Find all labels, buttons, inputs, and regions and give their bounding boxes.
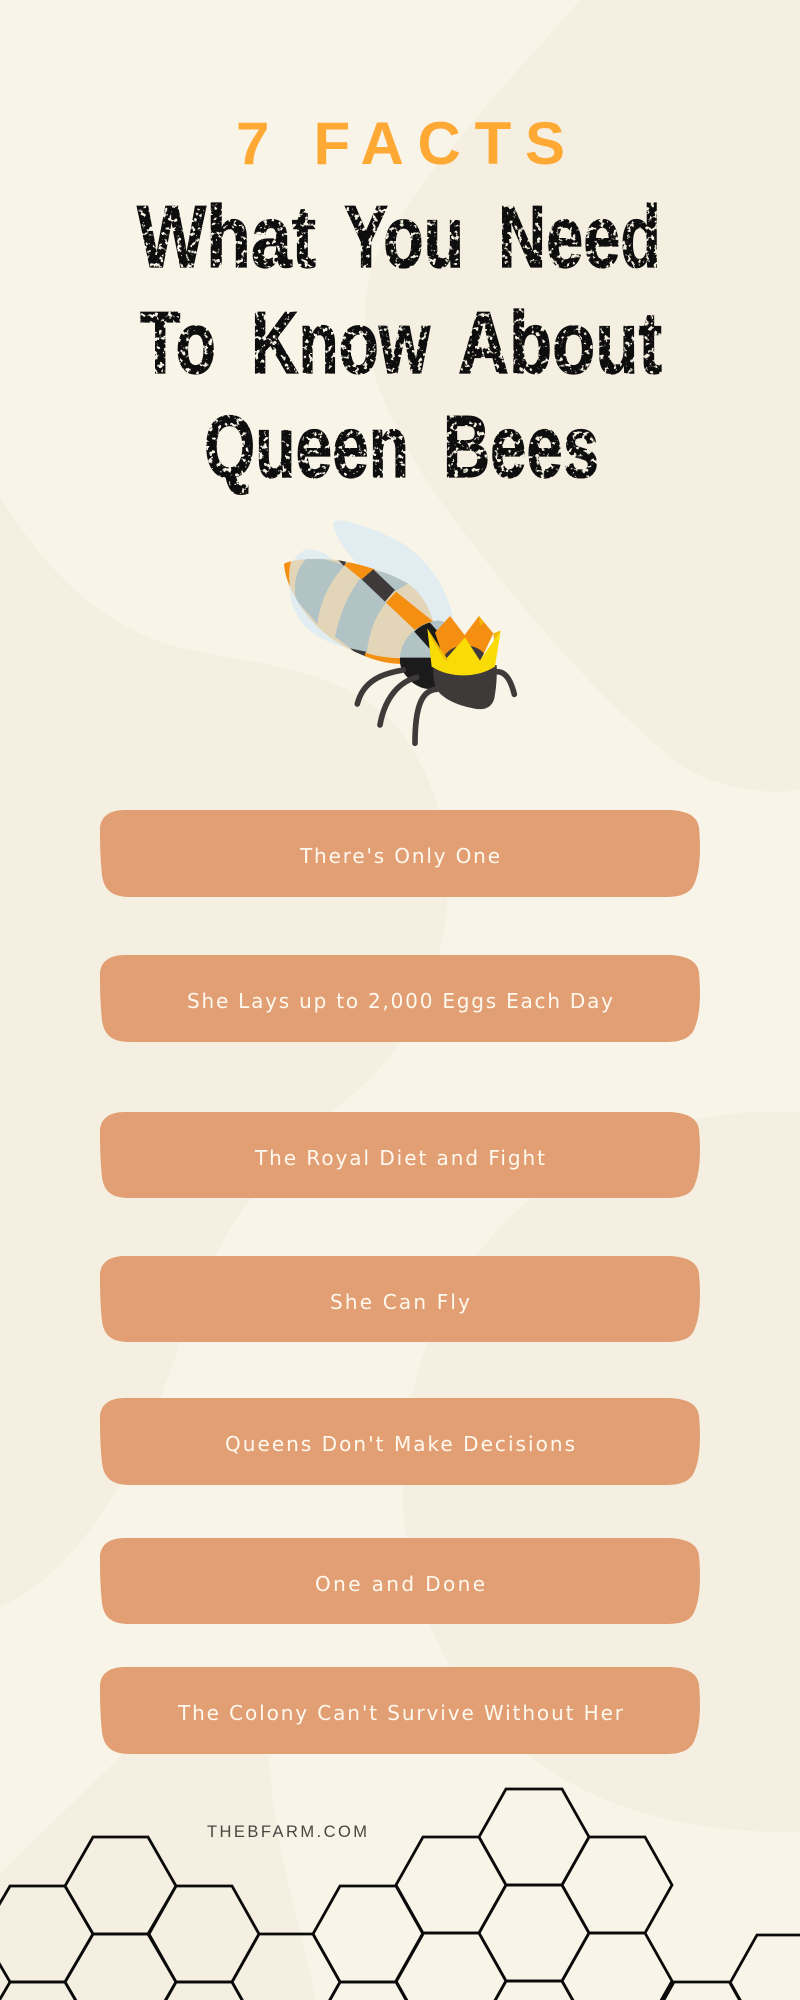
title: what you need to know about queen bees: What (137, 187, 316, 286)
bee thorax (400, 621, 457, 689)
title: what you need to know about queen bees: You (344, 187, 464, 286)
title: what you need to know about queen bees: Bees (443, 397, 599, 496)
title: what you need to know about queen bees (137, 187, 662, 496)
background blob: right (402, 1112, 800, 1832)
bee legs (357, 670, 514, 743)
button 4: she can fly: She Can Fly (330, 1290, 470, 1314)
button 7: the colony can't survive without her (100, 1667, 700, 1754)
title: what you need to know about queen bees: Queen (204, 397, 409, 496)
title: what you need to know about queen bees: Need (498, 187, 661, 286)
background blob: top right (365, 0, 800, 792)
background blob: left (0, 497, 448, 1607)
button 5: queens don't make decisions: Queens Don't Make Decisions (225, 1432, 575, 1456)
bee wings (290, 520, 454, 650)
button 3: the royal diet and fight (100, 1112, 700, 1198)
website label: THEBFARM.COM (207, 1823, 367, 1841)
icon: queen bee with crown (277, 520, 514, 743)
title: what you need to know about queen bees: About (458, 293, 662, 392)
button 2: she lays up to 2,000 eggs each day: She Lays up to 2,000 Eggs Each Day (187, 989, 613, 1013)
button 5: queens don't make decisions (100, 1398, 700, 1485)
background blob: bottom left (0, 1745, 316, 2000)
button 1: there's only one: There's Only One (299, 844, 500, 868)
button 7: the colony can't survive without her: The Colony Can't Survive Without Her (177, 1701, 624, 1725)
button 2: she lays up to 2,000 eggs each day (100, 955, 700, 1042)
subtitle: 7 facts: 7 FACTS (236, 110, 565, 177)
bee head (433, 665, 497, 709)
title: what you need to know about queen bees: To (140, 293, 216, 392)
button 1: there's only one (100, 810, 700, 897)
title: what you need to know about queen bees: Know (251, 293, 430, 392)
honeycomb pattern (0, 1789, 800, 2000)
button 6: one and done: One and Done (315, 1572, 485, 1596)
crown (427, 616, 501, 675)
bee abdomen (284, 558, 434, 664)
button 6: one and done (100, 1538, 700, 1624)
button 3: the royal diet and fight: The Royal Diet and Fight (254, 1146, 545, 1170)
button 4: she can fly (100, 1256, 700, 1342)
